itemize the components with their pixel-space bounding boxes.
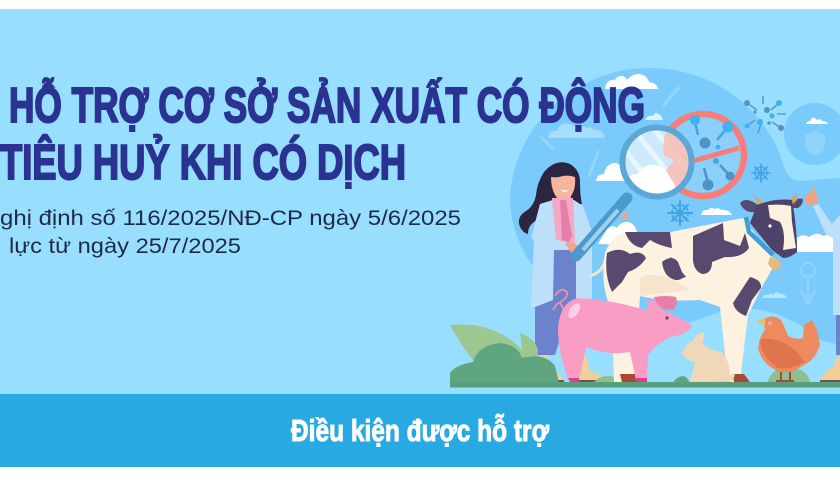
icon: red prohibition virus (662, 114, 744, 196)
woman vet (519, 162, 629, 382)
subtitle text: lực từ ngày 25/7/2025 (9, 235, 241, 258)
cow ears and horns (740, 200, 758, 212)
small round badge (784, 103, 840, 165)
smile (560, 189, 569, 192)
leaves behind bush (450, 324, 538, 360)
illustration: farm animals and vets (450, 68, 840, 388)
title: TIÊU HUỶ KHI CÓ DỊCH (0, 135, 406, 190)
ground shrubs (594, 368, 810, 382)
cow collar and bell (746, 217, 773, 255)
icon: shield on badge (805, 131, 825, 156)
icon: faint pill and thermometer (541, 88, 678, 176)
lab coat (531, 199, 592, 307)
cow udder (654, 296, 677, 310)
icon: caduceus (801, 263, 815, 305)
hair (519, 162, 582, 234)
right vet (805, 186, 840, 382)
cow tail (590, 260, 605, 276)
cow body (603, 218, 776, 382)
boots (536, 355, 564, 380)
subtitle text (0, 207, 461, 258)
shirt and tie (552, 198, 575, 244)
trousers (535, 250, 576, 355)
icon: virus cluster top right (744, 96, 786, 133)
ground strip (450, 382, 840, 388)
rabbit (682, 332, 735, 382)
cow hooves (620, 374, 750, 382)
ribbon mark (553, 290, 567, 310)
cow head (750, 200, 797, 258)
bush (450, 343, 559, 382)
hand (565, 242, 578, 254)
large backdrop circle (510, 68, 840, 345)
cow shadow (640, 275, 690, 296)
icon: small viruses (668, 164, 770, 225)
cow spots (606, 223, 761, 316)
subtitle text: ghị định số 116/2025/NĐ-CP ngày 5/6/2025 (0, 207, 461, 230)
magnifying glass (576, 125, 705, 256)
face (551, 176, 576, 198)
panel: blue section banner (0, 394, 840, 467)
clouds (548, 74, 835, 298)
title (0, 78, 645, 190)
cow (590, 192, 803, 382)
pig (558, 298, 692, 382)
hen (756, 316, 820, 381)
banner heading: Điều kiện được hỗ trợ (291, 413, 550, 448)
